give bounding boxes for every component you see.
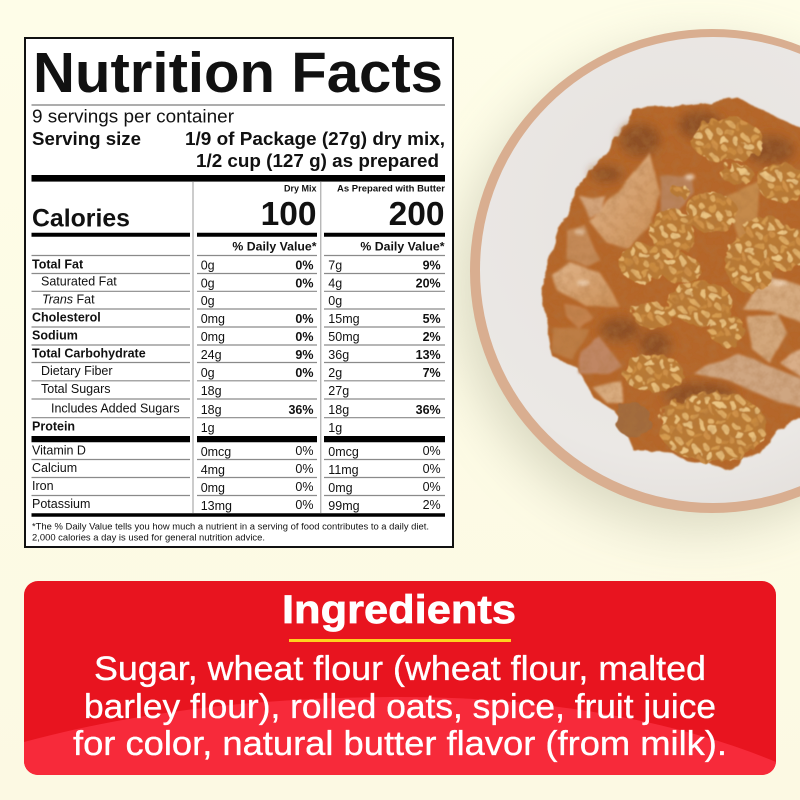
- bowl shadow: [458, 48, 800, 528]
- row: sodium: 50mg: [328, 330, 360, 344]
- row: sodium: Sodium: [32, 328, 78, 342]
- row: cholesterol: 5%: [423, 312, 441, 326]
- yellow underline: [289, 639, 511, 642]
- ingredients heading: Ingredients: [282, 588, 516, 632]
- title: Nutrition Facts: [33, 41, 443, 104]
- row: cholesterol: 15mg: [328, 312, 360, 326]
- row: iron: 0%: [423, 480, 441, 494]
- row: calcium: [32, 461, 441, 477]
- row: sodium: 2%: [423, 330, 441, 344]
- row: calcium: 4mg: [201, 463, 225, 477]
- red panel background: [24, 581, 776, 775]
- servings block: 1/2 cup (127 g) as prepared: [196, 151, 439, 171]
- label box: [25, 38, 453, 547]
- row: added sugars: Includes Added Sugars: [51, 401, 180, 415]
- row: total sugars: Total Sugars: [41, 382, 110, 396]
- row: sodium: [32, 328, 441, 344]
- apple crisp filling: [540, 97, 800, 467]
- row: cholesterol: [32, 311, 441, 326]
- photo: bowl of apple crisp: [458, 29, 800, 528]
- row: iron: 0mg: [201, 481, 225, 495]
- row: potassium: 13mg: [201, 499, 232, 513]
- row: added sugars: 36%: [288, 403, 314, 417]
- row: potassium: 0%: [295, 498, 314, 512]
- lighter wave: [24, 697, 776, 775]
- row: dietary fiber: [41, 364, 441, 380]
- row: total carbohydrate: 36g: [328, 348, 349, 362]
- row: added sugars: 36%: [416, 403, 441, 417]
- bowl rim: [470, 29, 800, 513]
- row: potassium: [32, 497, 441, 513]
- row: total carbohydrate: 13%: [416, 348, 441, 362]
- row: added sugars: 18g: [328, 403, 349, 417]
- calories row: Calories: [32, 205, 130, 233]
- column dividers and rules: [32, 182, 445, 517]
- row: total carbohydrate: 9%: [295, 348, 314, 362]
- syrup highlights: [575, 174, 788, 286]
- ingredients text: for color, natural butter flavor (from milk).: [73, 725, 727, 763]
- row: calcium: 0%: [295, 462, 314, 476]
- row: iron: 0mg: [328, 481, 353, 495]
- calories row: 100: [261, 196, 316, 233]
- row: protein: [32, 420, 342, 435]
- row: trans fat: [42, 292, 342, 308]
- row: dietary fiber: 2g: [328, 366, 342, 380]
- row: potassium: 2%: [423, 498, 441, 512]
- granola clusters: [619, 118, 800, 462]
- row: total fat: 0g: [201, 258, 215, 272]
- row: potassium: 99mg: [328, 499, 360, 513]
- row: iron: Iron: [32, 479, 54, 493]
- row: total carbohydrate: Total Carbohydrate: [32, 347, 146, 361]
- calories row: 200: [389, 196, 444, 233]
- row: saturated fat: [41, 275, 441, 290]
- row: saturated fat: 4g: [328, 276, 342, 290]
- row: total sugars: 18g: [201, 384, 222, 398]
- row: dietary fiber: Dietary Fiber: [41, 364, 113, 378]
- calories row: [32, 184, 446, 254]
- row: protein: 1g: [328, 421, 342, 435]
- row: cholesterol: Cholesterol: [32, 311, 101, 325]
- row: trans fat: Trans Fat: [42, 292, 95, 306]
- row: sodium: 0%: [295, 330, 314, 344]
- row: vitamin d: 0%: [423, 444, 441, 458]
- row: saturated fat: 0g: [201, 276, 215, 290]
- bowl interior: [480, 37, 800, 503]
- row: total fat: 7g: [328, 258, 342, 272]
- calories row: As Prepared with Butter: [337, 184, 446, 194]
- row: calcium: 11mg: [328, 463, 359, 477]
- row: total fat: 9%: [423, 258, 441, 272]
- row: vitamin d: 0%: [295, 444, 314, 458]
- row: saturated fat: 20%: [416, 276, 441, 290]
- row: dietary fiber: 7%: [423, 366, 441, 380]
- row: added sugars: [51, 401, 441, 417]
- row: total fat: Total Fat: [32, 257, 84, 271]
- calories row: % Daily Value*: [232, 240, 317, 254]
- row: total sugars: 27g: [328, 384, 349, 398]
- row: cholesterol: 0%: [295, 312, 314, 326]
- row: dietary fiber: 0g: [201, 366, 215, 380]
- row: cholesterol: 0mg: [201, 312, 225, 326]
- row: vitamin d: 0mcg: [201, 445, 231, 459]
- row: protein: 1g: [201, 421, 215, 435]
- footnote: [32, 521, 429, 542]
- row: total fat: 0%: [295, 258, 314, 272]
- calories row: Dry Mix: [284, 184, 316, 194]
- row: dietary fiber: 0%: [295, 366, 314, 380]
- panel: ingredients: [24, 581, 776, 775]
- row: saturated fat: 0%: [295, 276, 314, 290]
- row: iron: [32, 479, 441, 495]
- row: trans fat: 0g: [201, 294, 215, 308]
- servings block: 1/9 of Package (27g) dry mix,: [185, 129, 445, 149]
- filling base: [540, 97, 800, 467]
- row: total carbohydrate: [32, 347, 441, 362]
- row: sodium: 0mg: [201, 330, 225, 344]
- row: total carbohydrate: 24g: [201, 348, 222, 362]
- row: saturated fat: Saturated Fat: [41, 275, 117, 289]
- servings block: 9 servings per container: [32, 107, 234, 127]
- calories row: % Daily Value*: [360, 240, 445, 254]
- dark caramel patches: [591, 111, 794, 407]
- footnote: 2,000 calories a day is used for general nutrition advice.: [32, 532, 265, 542]
- apple pieces: [550, 153, 800, 410]
- row: vitamin d: [32, 443, 441, 459]
- row: vitamin d: 0mcg: [328, 445, 359, 459]
- ingredients text: [73, 650, 727, 763]
- servings block: [32, 104, 445, 182]
- ingredients text: barley flour), rolled oats, spice, fruit juice: [84, 688, 716, 726]
- row: calcium: 0%: [423, 462, 441, 476]
- row: iron: 0%: [295, 480, 314, 494]
- row: potassium: Potassium: [32, 497, 90, 511]
- row: total sugars: [41, 382, 349, 398]
- footnote: *The % Daily Value tells you how much a nutrient in a serving of food contributes to a daily diet.: [32, 521, 429, 531]
- ingredients text: Sugar, wheat flour (wheat flour, malted: [94, 650, 706, 688]
- row: added sugars: 18g: [201, 403, 222, 417]
- panel: nutrition facts label: [25, 38, 453, 547]
- row: calcium: Calcium: [32, 461, 77, 475]
- servings block: Serving size: [32, 129, 141, 149]
- dark crumble piece: [615, 403, 651, 437]
- row: protein: Protein: [32, 420, 75, 434]
- row: vitamin d: Vitamin D: [32, 443, 86, 457]
- row: total fat: [32, 257, 441, 272]
- row: trans fat: 0g: [328, 294, 342, 308]
